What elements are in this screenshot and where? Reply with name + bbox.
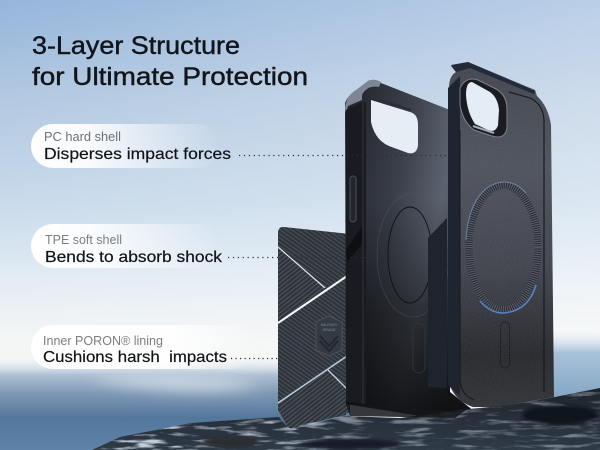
icon: military grade badge: GRADE [323, 328, 336, 332]
alignment slot [500, 322, 510, 368]
callout: TPE soft shell: Bends to absorb shock [45, 249, 223, 266]
side rail [346, 102, 366, 404]
magnetic ring outline [377, 193, 449, 373]
camera cutout [460, 79, 507, 137]
callout: Inner PORON lining: Inner PORON® lining [43, 334, 163, 348]
corner highlight [345, 80, 381, 113]
magnetic ring [466, 182, 538, 313]
callout: PC hard shell: Disperses impact forces [44, 146, 231, 163]
top edge tab [451, 62, 535, 94]
panel: side flap of front shell [428, 218, 447, 388]
title [32, 32, 308, 91]
lens opening [371, 100, 418, 153]
callout: TPE soft shell: TPE soft shell [45, 233, 122, 247]
title: 3-Layer Structure [32, 32, 240, 60]
panel: third layer, PORON lining [278, 227, 350, 428]
panel: first layer, PC hard shell [448, 60, 558, 410]
panel: second layer, TPE soft shell [345, 80, 475, 416]
callout: PC hard shell [31, 124, 454, 168]
callout: Inner PORON lining: Cushions harsh impacts [43, 349, 227, 366]
callout: TPE soft shell [31, 224, 403, 268]
right inner edge [509, 92, 544, 392]
title: for Ultimate Protection [32, 63, 308, 91]
callout: Inner PORON lining [31, 325, 278, 369]
side button [350, 176, 356, 222]
rock foreground [90, 385, 600, 450]
back layer lower corner in front of rock [279, 410, 346, 428]
icon: military grade badge: MILITARY [321, 323, 338, 327]
callout: PC hard shell: PC hard shell [44, 130, 121, 144]
left rail [448, 76, 460, 396]
icon: military grade badge [316, 316, 342, 356]
